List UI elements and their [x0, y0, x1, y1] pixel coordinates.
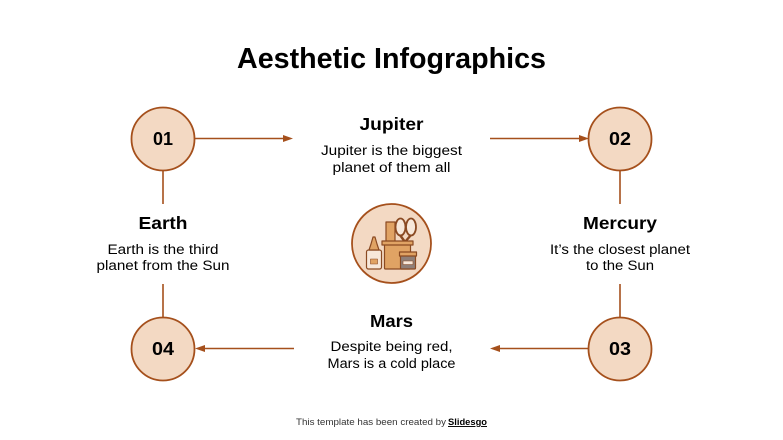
text block: Earth: Earth is the third: [108, 242, 218, 257]
glue bottle: [366, 250, 382, 269]
text block: Mercury: to the Sun: [586, 258, 654, 273]
text block: Mars: Mars is a cold place: [328, 356, 456, 371]
text block: Jupiter: planet of them all: [332, 160, 451, 175]
ruler: [386, 222, 395, 242]
connector: Mercury to 03: [619, 284, 621, 318]
text block: Jupiter: Jupiter: [360, 114, 424, 134]
step 01 node: [132, 108, 194, 170]
connector: Earth to 04: [162, 284, 164, 318]
text block: Jupiter: Jupiter is the biggest: [321, 143, 462, 158]
text block: Mercury: It’s the closest planet: [550, 242, 690, 257]
text block: Earth: planet from the Sun: [96, 258, 230, 273]
step 02 node: 02: [609, 129, 631, 149]
step 01 node: 01: [153, 129, 173, 149]
arrow: 01 to Jupiter: [195, 135, 293, 142]
text block: Mars: Mars: [370, 311, 413, 331]
connector: 02 to Mercury: [619, 170, 621, 204]
arrow: Jupiter to 02: [490, 135, 589, 142]
text block: Earth: [96, 213, 230, 273]
text block: Jupiter: [321, 114, 462, 175]
text block: Mercury: [550, 213, 690, 273]
text block: Mercury: Mercury: [583, 213, 657, 233]
step 02 node: [588, 108, 652, 170]
footer credit: Slidesgo: [448, 417, 487, 428]
pencil cup: [384, 243, 410, 269]
step 03 node: 03: [609, 339, 631, 359]
title: Aesthetic Infographics: [237, 43, 546, 75]
text block: Mars: Despite being red,: [330, 339, 452, 354]
icon: stationery in central circle: [352, 204, 431, 283]
arrow: 03 to Mars: [490, 345, 588, 352]
text block: Mars: [328, 311, 456, 371]
arrow: Mars to 04: [195, 345, 294, 352]
step 04 node: [132, 318, 194, 380]
step 03 node: [588, 318, 652, 380]
jar: [400, 255, 416, 269]
scissors: [396, 218, 416, 242]
step 04 node: 04: [152, 339, 174, 359]
connector: 01 to Earth: [162, 170, 164, 204]
text block: Earth: Earth: [138, 213, 188, 233]
footer credit: This template has been created by: [296, 417, 446, 428]
